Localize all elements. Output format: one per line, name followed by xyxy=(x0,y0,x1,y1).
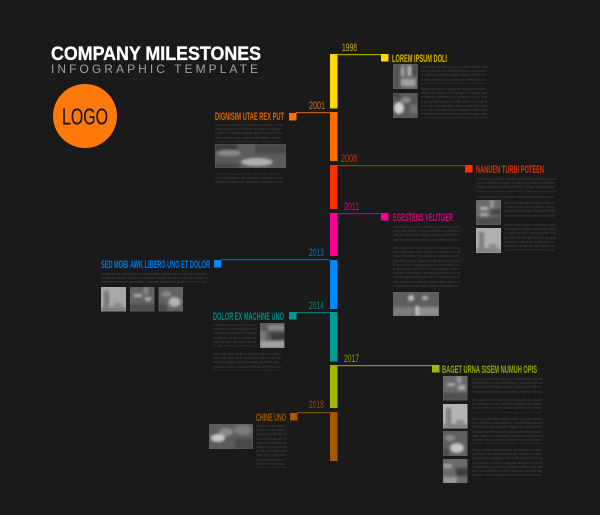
thumbnail xyxy=(443,431,468,456)
milestone 2014 xyxy=(213,300,338,370)
milestone 2011 xyxy=(330,201,461,316)
thumbnail xyxy=(476,200,501,225)
thumbnail xyxy=(393,292,439,316)
thumbnail xyxy=(130,287,154,312)
thumbnail xyxy=(443,376,468,400)
thumbnail xyxy=(393,93,418,118)
timeline segment xyxy=(330,54,338,108)
connector xyxy=(337,213,381,214)
connector xyxy=(296,312,330,313)
heading: DOLOR EX MACHINE UNO xyxy=(213,311,284,323)
marker xyxy=(381,54,388,62)
timeline segment xyxy=(330,213,338,256)
heading: DIGNISIM UTAE REX PUT xyxy=(215,111,284,123)
milestone 2013 xyxy=(101,247,338,312)
heading: EGESTENS VELITGER xyxy=(393,212,453,224)
thumbnail xyxy=(215,144,286,168)
thumbnail xyxy=(209,424,253,449)
logo: LOGO xyxy=(62,104,108,130)
timeline segment xyxy=(330,365,338,408)
title: COMPANY MILESTONES xyxy=(51,43,261,65)
thumbnail xyxy=(393,64,418,89)
connector xyxy=(337,54,381,55)
year: 2014 xyxy=(309,300,324,312)
milestone 1998 xyxy=(330,42,488,118)
marker xyxy=(381,213,388,220)
year: 2017 xyxy=(344,353,359,365)
marker xyxy=(432,365,440,372)
timeline segment xyxy=(330,165,338,209)
subtitle: INFOGRAPHIC TEMPLATE xyxy=(51,62,258,76)
milestone 2017 xyxy=(330,353,543,484)
year: 2018 xyxy=(309,399,324,411)
thumbnail xyxy=(158,287,183,312)
marker xyxy=(289,113,296,120)
timeline segment xyxy=(330,112,338,161)
thumbnail xyxy=(443,404,468,428)
connector xyxy=(296,112,330,113)
marker xyxy=(290,413,298,420)
timeline segment xyxy=(330,412,338,461)
milestone 2001 xyxy=(215,100,338,183)
heading: SED MOBI AWK LIBERO UNO ET DOLOR xyxy=(101,259,210,271)
marker xyxy=(465,165,472,172)
connector xyxy=(297,412,330,413)
marker xyxy=(214,260,222,268)
year: 2001 xyxy=(309,100,325,112)
heading: LOREM IPSUM DOLI xyxy=(392,53,447,65)
logo xyxy=(53,84,117,148)
timeline segment xyxy=(330,260,338,309)
milestone 2008 xyxy=(330,153,557,253)
thumbnail xyxy=(260,323,284,348)
connector xyxy=(221,259,330,260)
year: 2011 xyxy=(344,201,359,213)
timeline segment xyxy=(330,312,338,362)
thumbnail xyxy=(476,228,501,253)
year: 2013 xyxy=(309,247,324,259)
connector xyxy=(337,365,432,366)
year: 1998 xyxy=(342,42,357,54)
milestone 2018: CHINE UNO xyxy=(256,412,286,424)
year: 2008 xyxy=(341,153,357,165)
connector xyxy=(337,165,465,166)
milestone 2018 xyxy=(209,399,338,468)
thumbnail xyxy=(101,287,126,312)
thumbnail xyxy=(443,459,468,483)
marker xyxy=(289,312,296,320)
